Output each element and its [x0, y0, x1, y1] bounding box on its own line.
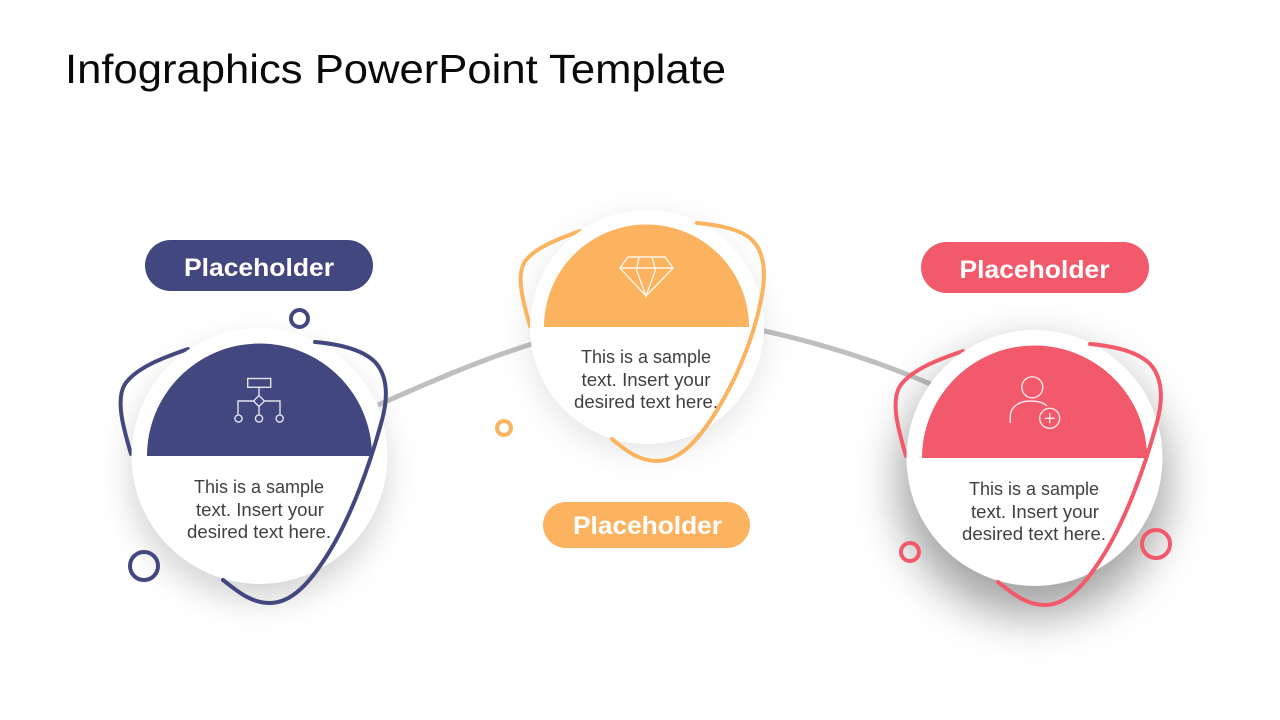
- right body text: This is a sample: [969, 479, 1099, 499]
- right pill: [921, 242, 1149, 293]
- right blob outline front: [998, 344, 1161, 605]
- middle blob outline front: [612, 223, 764, 461]
- middle blob outline back: [521, 231, 580, 326]
- right large ring: [1142, 530, 1170, 558]
- left half disc: [147, 344, 372, 456]
- right blob outline back: [896, 351, 963, 456]
- left body text: desired text here.: [187, 522, 331, 542]
- right white circle: [906, 330, 1162, 586]
- left body text: text. Insert your: [196, 500, 324, 520]
- right body text: desired text here.: [962, 524, 1106, 544]
- icon: add user: [1010, 377, 1060, 428]
- middle pill: [543, 502, 750, 548]
- middle small ring: [497, 421, 511, 435]
- left blob outline back: [121, 349, 188, 454]
- left body text: [187, 477, 331, 542]
- left pill: Placeholder: [184, 254, 334, 282]
- right small ring: [901, 543, 919, 561]
- right body text: text. Insert your: [971, 502, 1099, 522]
- right pill: Placeholder: [960, 256, 1110, 284]
- left body text: This is a sample: [194, 477, 324, 497]
- right body text: [962, 479, 1106, 544]
- panel: right step: [896, 242, 1170, 616]
- middle white circle: [530, 210, 764, 444]
- right half disc: [922, 346, 1147, 458]
- middle circle shadow: [529, 219, 763, 453]
- middle body text: This is a sample: [581, 347, 711, 367]
- left blob outline front: [223, 342, 386, 603]
- left white circle: [132, 328, 388, 584]
- icon: flowchart: [235, 378, 283, 422]
- left large ring bottom: [130, 552, 158, 580]
- left small ring top: [291, 310, 308, 327]
- left circle shadow: [130, 344, 386, 600]
- middle body text: text. Insert your: [582, 370, 710, 390]
- middle body text: [574, 347, 718, 412]
- connector curve: [378, 330, 935, 405]
- icon: diamond: [620, 257, 673, 296]
- left pill: [145, 240, 373, 291]
- panel: middle step: [497, 210, 764, 548]
- title: Infographics PowerPoint Template: [65, 46, 726, 92]
- right circle shadow: [899, 348, 1167, 616]
- middle half disc: [544, 224, 749, 327]
- panel: left step: [121, 240, 387, 603]
- middle pill: Placeholder: [573, 512, 722, 540]
- middle body text: desired text here.: [574, 392, 718, 412]
